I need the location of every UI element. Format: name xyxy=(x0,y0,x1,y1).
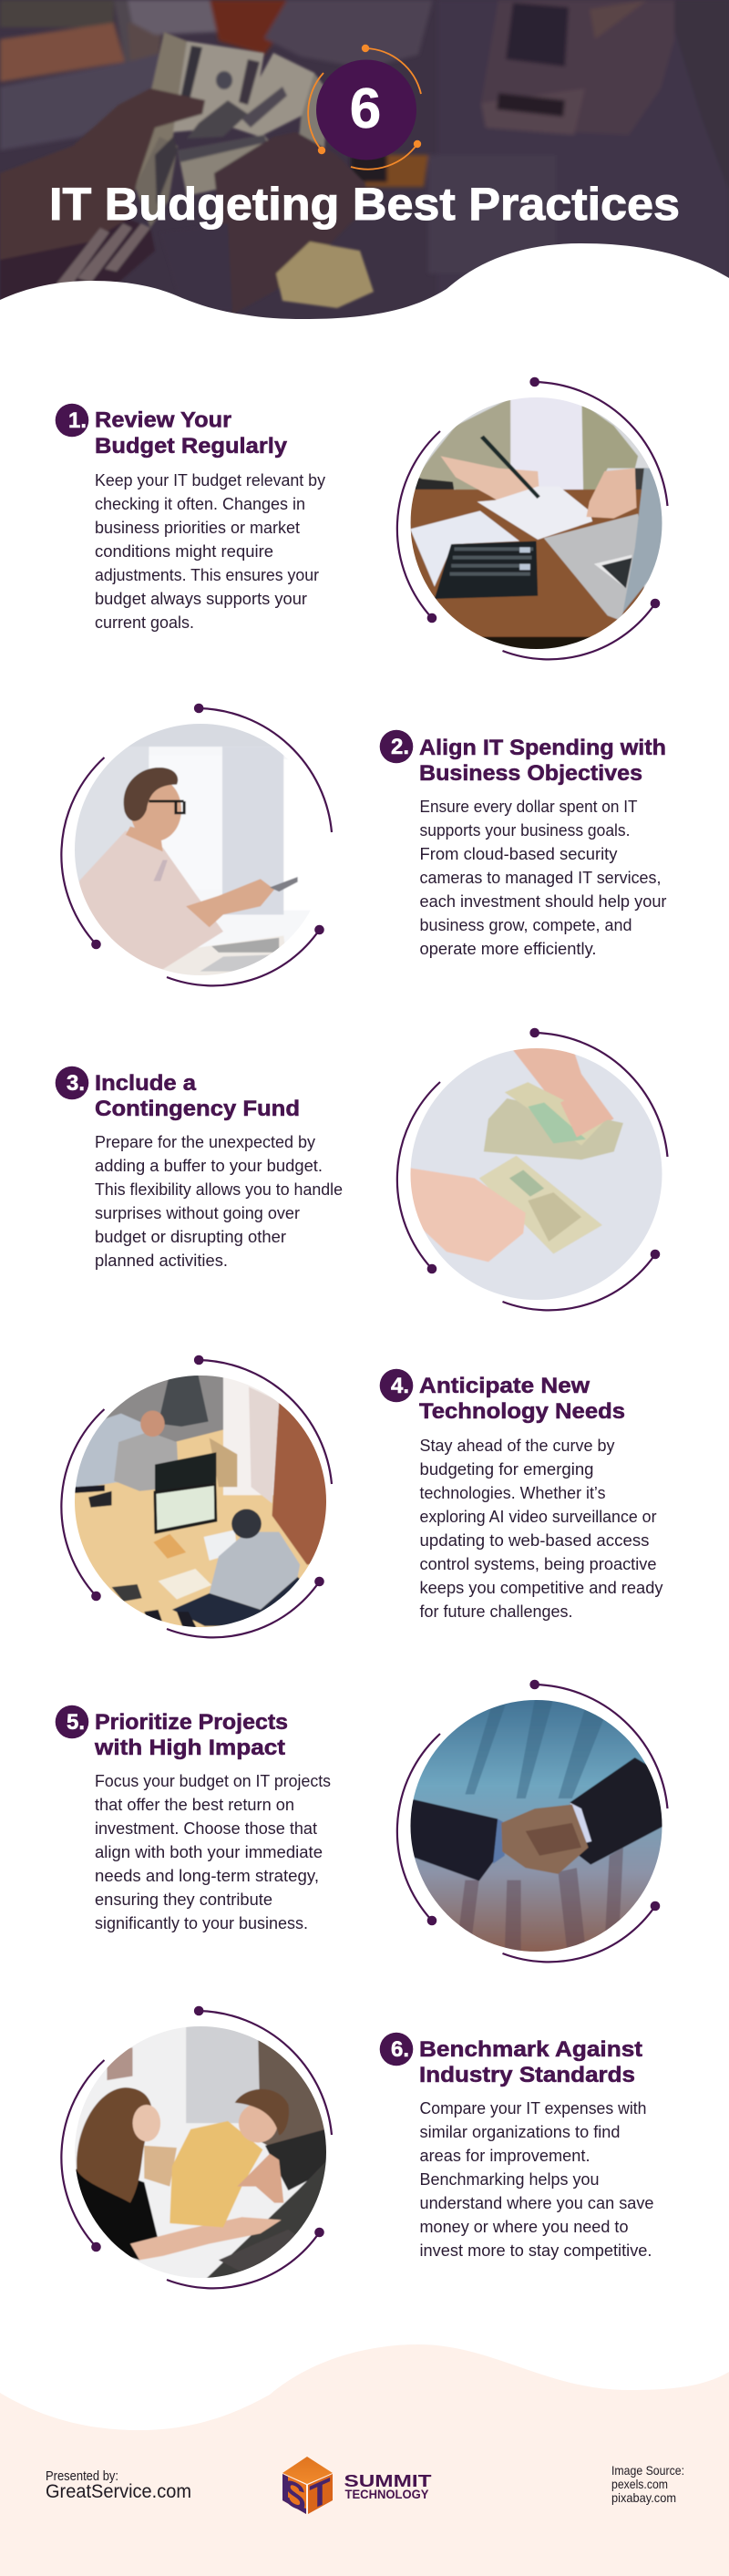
body text 2: each investment should help your xyxy=(419,891,667,911)
heading 5: Prioritize Projects xyxy=(95,1710,288,1735)
ring 3 xyxy=(397,1028,667,1310)
body text 4 xyxy=(419,1436,663,1621)
logo: Summit Technology: S xyxy=(283,2470,306,2520)
number badge 1: 1. xyxy=(68,408,87,433)
body text 5: that offer the best return on xyxy=(95,1795,294,1814)
number badge 1 xyxy=(56,404,88,437)
body text 1: Keep your IT budget relevant by xyxy=(95,470,326,489)
photo 6: two women at a table xyxy=(60,2006,340,2288)
body text 4: control systems, being proactive xyxy=(419,1554,656,1573)
body text 1: current goals. xyxy=(95,613,194,632)
body text 4: for future challenges. xyxy=(419,1602,572,1621)
heading 5 xyxy=(94,1710,288,1760)
header white wave xyxy=(0,243,729,365)
body text 5: align with both your immediate xyxy=(95,1842,323,1861)
body text 2: operate more efficiently. xyxy=(419,939,596,958)
heading 5: with High Impact xyxy=(94,1736,285,1760)
icon: number badge with orange ring: 6 xyxy=(350,77,381,140)
number badge 6 xyxy=(380,2033,413,2066)
number badge 3: 3. xyxy=(67,1071,85,1096)
panel: step 4 text xyxy=(380,1369,663,1621)
body text 3: planned activities. xyxy=(95,1251,228,1270)
body text 2: business grow, compete, and xyxy=(419,915,632,934)
photo 5: business handshake xyxy=(397,1680,679,1962)
image source: pexels.com xyxy=(611,2477,668,2491)
title: IT Budgeting Best Practices xyxy=(49,179,680,230)
ring 4 xyxy=(61,1355,332,1637)
presented by xyxy=(46,2468,191,2502)
body text 3: budget or disrupting other xyxy=(95,1227,286,1246)
presented by: GreatService.com xyxy=(46,2481,191,2502)
body text 4: technologies. Whether it’s xyxy=(419,1483,605,1502)
body text 6: Benchmarking helps you xyxy=(419,2169,600,2189)
heading 6: Benchmark Against xyxy=(419,2037,642,2062)
photo 1: hands with calculator and laptop xyxy=(397,377,674,659)
heading 3: Include a xyxy=(95,1071,196,1096)
body text 5: Focus your budget on IT projects xyxy=(95,1771,331,1790)
image source: pixabay.com xyxy=(611,2490,676,2505)
body text 6: Compare your IT expenses with xyxy=(419,2098,647,2117)
body text 2: cameras to managed IT services, xyxy=(419,868,662,887)
body text 6: understand where you can save xyxy=(419,2193,654,2212)
logo: Summit Technology xyxy=(282,2457,432,2520)
number badge 4 xyxy=(380,1369,413,1402)
logo: Summit Technology: T xyxy=(309,2470,331,2519)
heading 4 xyxy=(419,1374,625,1424)
image source xyxy=(611,2463,684,2505)
heading 4: Technology Needs xyxy=(419,1399,625,1424)
ring 5 xyxy=(397,1680,667,1962)
body text 3 xyxy=(95,1132,343,1270)
heading 1: Budget Regularly xyxy=(95,434,287,459)
body text 6: areas for improvement. xyxy=(419,2146,590,2165)
ring 6 xyxy=(61,2006,332,2288)
body text 3: This flexibility allows you to handle xyxy=(95,1180,343,1199)
ring 2 xyxy=(61,704,332,985)
body text 2: Ensure every dollar spent on IT xyxy=(419,797,638,816)
heading 4: Anticipate New xyxy=(419,1374,590,1398)
heading 6 xyxy=(419,2037,642,2087)
number badge 2 xyxy=(380,730,413,763)
body text 1: budget always supports your xyxy=(95,589,307,608)
body text 5: needs and long-term strategy, xyxy=(95,1866,319,1885)
icon: number badge with orange ring xyxy=(308,45,421,170)
photo 3: hands exchanging dollar bills xyxy=(397,1028,679,1310)
body text 4: updating to web-based access xyxy=(419,1530,649,1550)
panel: step 5 text xyxy=(56,1705,331,1932)
body text 6: invest more to stay competitive. xyxy=(419,2241,652,2260)
footer wave background xyxy=(0,2344,729,2576)
panel: step 3 text xyxy=(56,1066,343,1270)
body text 5 xyxy=(95,1771,331,1932)
body text 2 xyxy=(419,797,667,958)
number badge 2: 2. xyxy=(391,735,409,759)
body text 5: ensuring they contribute xyxy=(95,1890,272,1909)
photo 2: man with phone xyxy=(60,704,340,986)
header banner photo xyxy=(0,0,729,346)
heading 1 xyxy=(95,408,287,459)
body text 5: significantly to your business. xyxy=(95,1913,308,1932)
body text 1: checking it often. Changes in xyxy=(95,494,305,513)
number badge 4: 4. xyxy=(391,1374,409,1398)
panel: step 1 text xyxy=(56,404,326,632)
number badge 5 xyxy=(56,1705,88,1738)
photo 4: open office from above xyxy=(60,1355,340,1637)
heading 6: Industry Standards xyxy=(419,2063,635,2087)
ring 1 xyxy=(397,377,667,659)
heading 1: Review Your xyxy=(95,408,231,432)
heading 3 xyxy=(95,1071,300,1121)
number badge 6: 6. xyxy=(391,2037,409,2062)
body text 4: Stay ahead of the curve by xyxy=(419,1436,615,1455)
presented by: Presented by: xyxy=(46,2468,118,2484)
body text 1: adjustments. This ensures your xyxy=(95,565,319,584)
number badge 3 xyxy=(56,1066,88,1099)
heading 2: Align IT Spending with xyxy=(419,736,666,760)
body text 3: Prepare for the unexpected by xyxy=(95,1132,316,1151)
panel: step 2 text xyxy=(380,730,667,958)
body text 4: exploring AI video surveillance or xyxy=(419,1507,656,1526)
body text 4: keeps you competitive and ready xyxy=(419,1578,663,1597)
body text 1 xyxy=(95,470,326,632)
body text 6 xyxy=(419,2098,654,2260)
body text 1: business priorities or market xyxy=(95,518,300,537)
logo: Summit Technology: SUMMIT xyxy=(344,2472,432,2490)
body text 2: From cloud-based security xyxy=(419,844,618,863)
heading 2 xyxy=(419,736,666,786)
body text 1: conditions might require xyxy=(95,541,273,561)
panel: step 6 text xyxy=(380,2033,654,2260)
body text 3: surprises without going over xyxy=(95,1203,300,1222)
body text 5: investment. Choose those that xyxy=(95,1819,317,1838)
image source: Image Source: xyxy=(611,2463,684,2478)
body text 3: adding a buffer to your budget. xyxy=(95,1156,323,1175)
body text 4: budgeting for emerging xyxy=(419,1459,594,1479)
body text 6: money or where you need to xyxy=(419,2217,629,2236)
body text 2: supports your business goals. xyxy=(419,820,631,840)
body text 6: similar organizations to find xyxy=(419,2122,620,2141)
heading 2: Business Objectives xyxy=(419,761,642,786)
logo: Summit Technology: TECHNOLOGY xyxy=(344,2488,428,2501)
heading 3: Contingency Fund xyxy=(95,1097,300,1121)
number badge 5: 5. xyxy=(67,1710,85,1735)
